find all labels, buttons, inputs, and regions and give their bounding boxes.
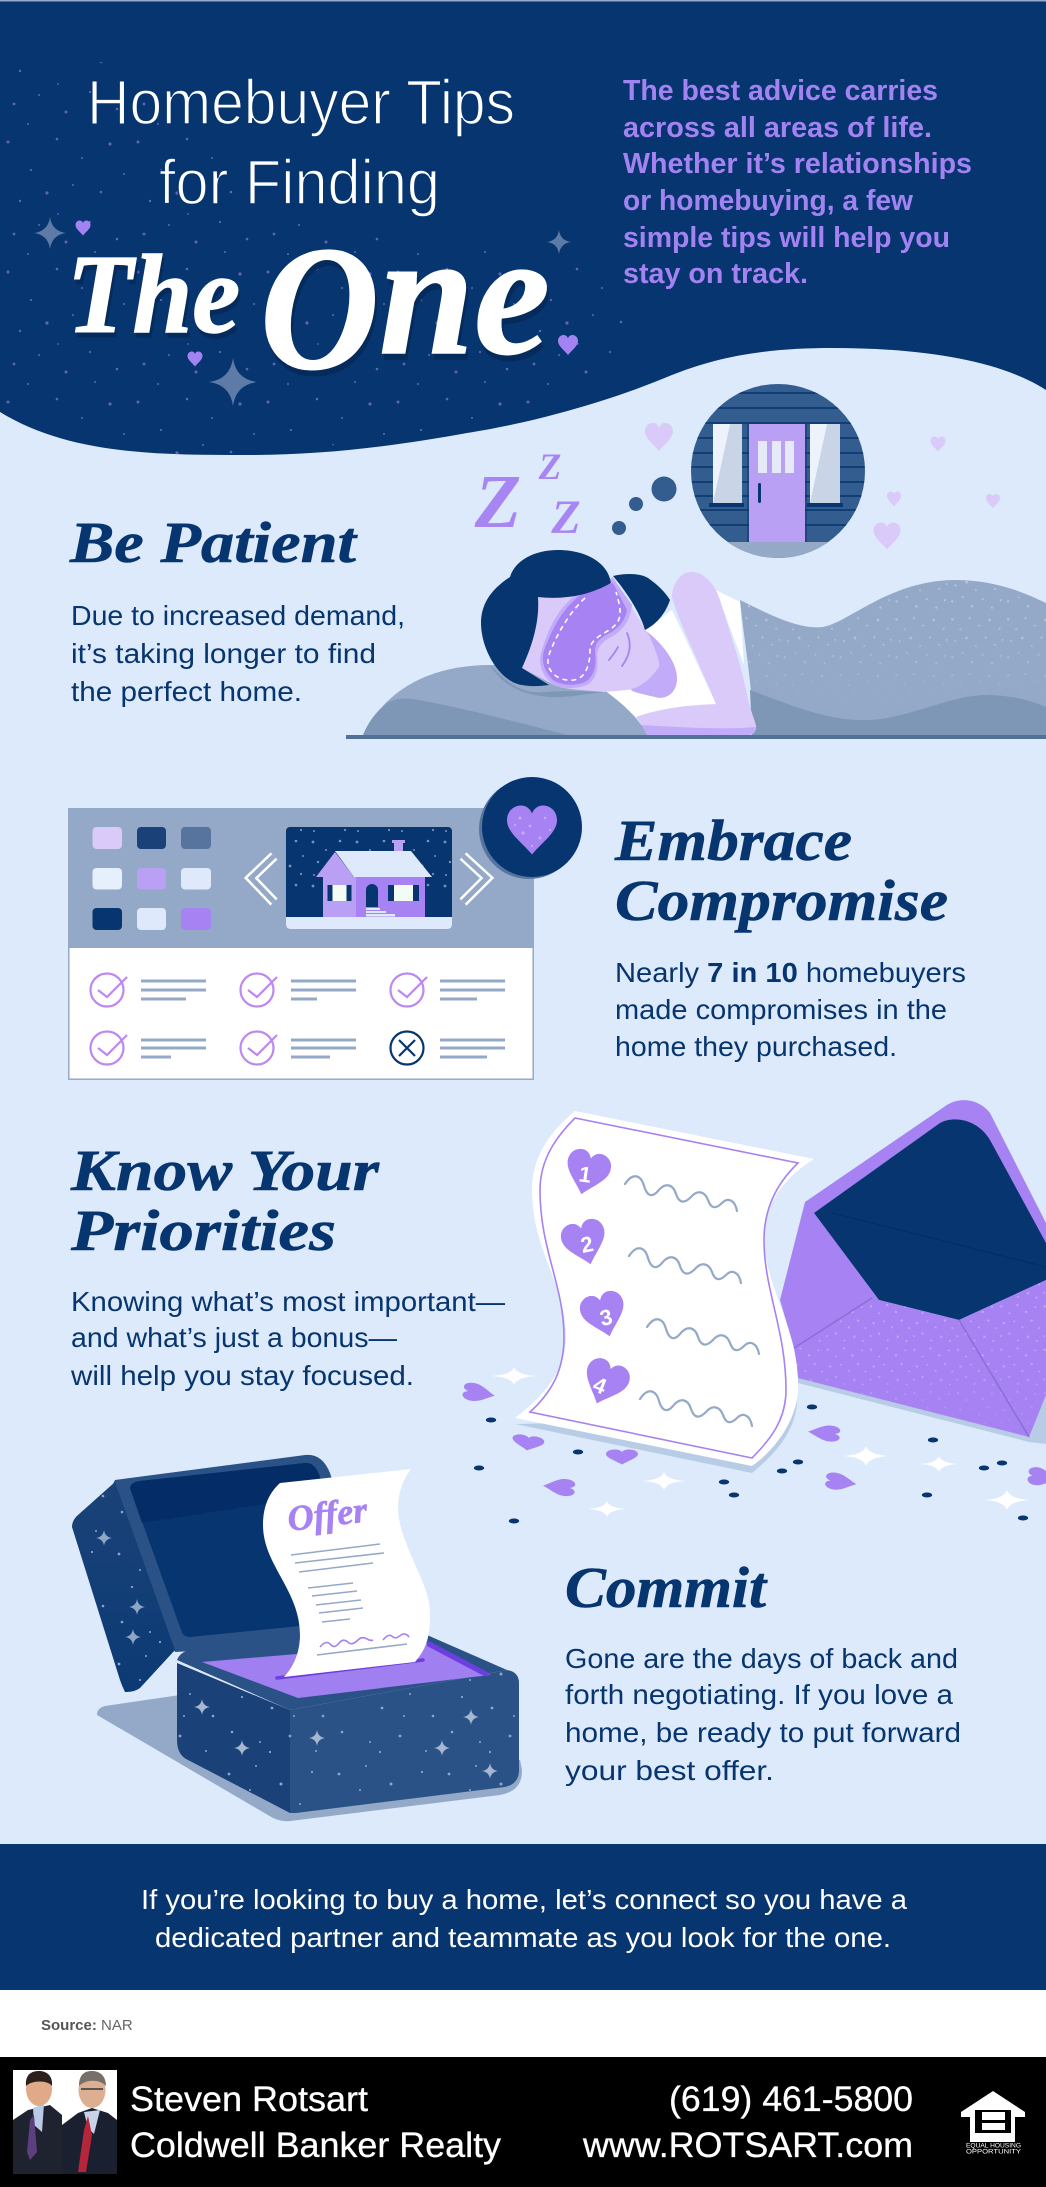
illustration: priority list paper [515, 1111, 814, 1473]
text: be patient body: Due to increased demand, [71, 600, 405, 631]
intro paragraph: or homebuying, a few [623, 185, 913, 217]
house photo [286, 827, 452, 929]
sleep letters: Z [550, 491, 581, 544]
card header [68, 808, 534, 948]
sparkle stars [34, 217, 571, 406]
intro paragraph: The best advice carries [623, 75, 938, 107]
section: know your priorities [70, 1100, 1046, 1524]
agent name and company: Steven Rotsart [130, 2080, 368, 2119]
neck [631, 630, 677, 698]
text: be patient body: it’s taking longer to find [71, 638, 376, 669]
squiggle lines [625, 1176, 759, 1426]
icon: dream house bubble [690, 384, 870, 562]
title: ne [379, 197, 550, 392]
source strip [0, 1990, 1046, 2057]
confetti hearts [462, 1381, 1046, 1497]
thought bubbles [612, 476, 676, 535]
title: The [67, 233, 240, 357]
list numbers [577, 1161, 615, 1400]
envelope flap [805, 1100, 1046, 1300]
icon: heart badge [479, 777, 582, 879]
confetti [462, 1367, 1046, 1524]
sleep letters [474, 447, 581, 544]
icon: equal housing opportunity: OPPORTUNITY [966, 2148, 1022, 2156]
heading: Know Your Priorities: Priorities [70, 1198, 336, 1263]
agent name and company [130, 2080, 502, 2165]
section: be patient [69, 384, 1046, 739]
phone and website: (619) 461-5800 [669, 2080, 913, 2119]
heading: Embrace Compromise: Embrace [614, 808, 852, 873]
icon: equal housing opportunity [961, 2091, 1025, 2156]
text: priorities body: Knowing what’s most important— [71, 1286, 505, 1317]
header panel [0, 0, 1046, 455]
text: priorities body [70, 1286, 505, 1391]
header hearts [76, 220, 578, 366]
phone and website [582, 2080, 913, 2165]
list numbers: 2 [578, 1231, 595, 1258]
checklist [90, 974, 505, 1064]
title [67, 68, 550, 407]
title: Homebuyer Tips [87, 68, 515, 138]
agent photo [13, 2070, 117, 2174]
intro paragraph: Whether it’s relationships [623, 148, 972, 180]
header wave background [0, 0, 1046, 455]
title: O [260, 209, 379, 407]
icon: equal housing opportunity: EQUAL HOUSING [966, 2142, 1021, 2150]
box shadow [97, 1695, 522, 1821]
intro paragraph: across all areas of life. [623, 112, 932, 144]
arrow: previous [251, 856, 274, 902]
illustration: envelope [780, 1100, 1046, 1444]
text: compromise body: home they purchased. [615, 1031, 897, 1062]
list numbers: 1 [577, 1161, 593, 1188]
text: priorities body: will help you stay focused. [70, 1360, 414, 1391]
intro paragraph [623, 75, 972, 290]
arrow: next [463, 856, 487, 902]
pillow [363, 665, 647, 735]
hair [481, 550, 611, 686]
intro paragraph: simple tips will help you [623, 222, 950, 254]
confetti stars [491, 1367, 1030, 1517]
sleep letters: Z [538, 447, 561, 488]
sleep mask [540, 578, 632, 688]
envelope left side [780, 1202, 879, 1348]
illustration: jewelry box with offer [72, 1455, 522, 1821]
text: commit body: forth negotiating. If you love a [565, 1679, 953, 1710]
source strip: Source: NAR [41, 2017, 133, 2034]
icon: rejected item [390, 1032, 424, 1064]
shirt [604, 610, 716, 717]
text: commit body: Gone are the days of back and [565, 1643, 958, 1674]
heading: Be Patient: Be Patient [69, 510, 358, 575]
list numbers: 4 [589, 1372, 611, 1400]
color swatches [92, 827, 211, 930]
card body [69, 809, 533, 1079]
heading: Know Your Priorities [70, 1138, 379, 1263]
hearts around dream [645, 423, 1000, 550]
arm [636, 572, 756, 735]
sleep letters: Z [474, 460, 521, 544]
text: commit body: home, be ready to put forward [565, 1717, 961, 1748]
envelope front [794, 1280, 1046, 1437]
heading: Commit: Commit [565, 1555, 768, 1620]
list numbers: 3 [598, 1304, 615, 1331]
list item hearts [558, 1146, 634, 1412]
lid [72, 1455, 385, 1692]
phone and website: www.ROTSART.com [582, 2126, 913, 2165]
call to action band: If you’re looking to buy a home, let’s connect so you have a [141, 1884, 907, 1915]
intro paragraph: stay on track. [623, 258, 808, 290]
illustration: sleeping woman [346, 550, 1046, 739]
offer title: Offer [285, 1489, 370, 1539]
text: compromise body: Nearly 7 in 10 homebuyers [615, 957, 966, 988]
heading: Embrace Compromise [614, 808, 948, 933]
closed eye and ear lines [609, 633, 630, 666]
agent name and company: Coldwell Banker Realty [130, 2126, 502, 2165]
envelope interior [814, 1119, 1046, 1320]
heading: Know Your Priorities: Know Your [70, 1138, 379, 1203]
section: commit [72, 1455, 961, 1821]
text: priorities body: and what’s just a bonus— [71, 1322, 397, 1353]
agent footer [0, 2057, 1046, 2187]
header star speckles [0, 60, 640, 455]
text: compromise body [615, 957, 966, 1062]
floor line [346, 735, 1046, 739]
box base [177, 1635, 519, 1813]
offer paper [263, 1469, 430, 1677]
section: embrace compromise [68, 777, 966, 1079]
shirt back [716, 590, 744, 665]
blanket [740, 580, 1046, 735]
offer signature [320, 1634, 409, 1647]
call to action band [0, 1844, 1046, 1990]
face [522, 577, 659, 692]
title: for Finding [159, 148, 440, 218]
text: commit body: your best offer. [565, 1755, 774, 1786]
text: compromise body: made compromises in the [615, 994, 947, 1025]
text: commit body [565, 1643, 961, 1786]
confetti dots [474, 1404, 1028, 1524]
heading: Embrace Compromise: Compromise [615, 868, 948, 933]
panel: listing card [68, 777, 582, 1079]
text: be patient body [71, 600, 405, 707]
text: be patient body: the perfect home. [71, 676, 302, 707]
offer text lines [291, 1544, 407, 1655]
call to action band: dedicated partner and teammate as you look for the one. [155, 1922, 891, 1953]
